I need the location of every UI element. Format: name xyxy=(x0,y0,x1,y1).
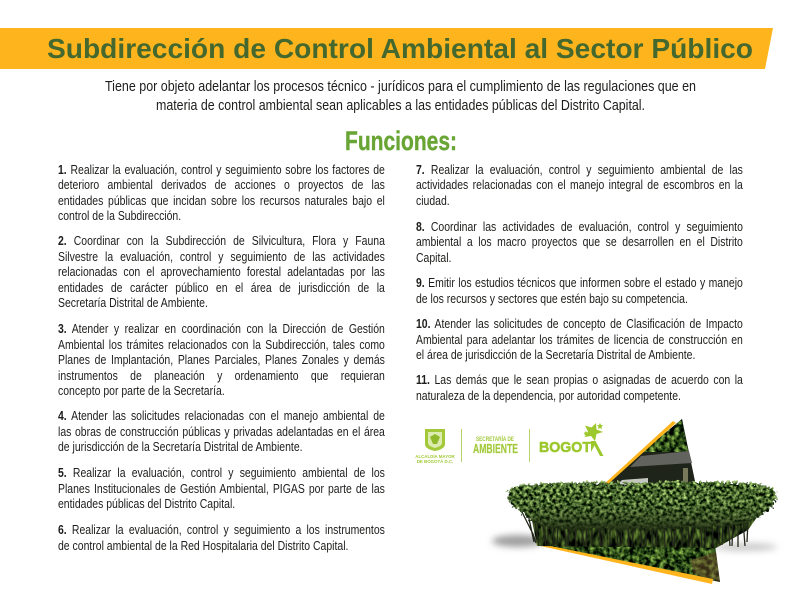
function 2: entidades de carácter público en el área de jurisdicción de la xyxy=(58,280,385,294)
logo: Bogotá: BOGOT xyxy=(539,439,591,456)
function 7: 7. Realizar la evaluación, control y seguimiento ambiental de las xyxy=(416,162,743,176)
function 9 xyxy=(416,276,743,306)
function 5: Planes Institucionales de Gestión Ambiental, PIGAS por parte de las xyxy=(58,482,385,496)
function 3: Ambiental los trámites relacionados con la Subdirección, tales como xyxy=(58,338,385,352)
function 11 xyxy=(416,373,743,402)
function 7 xyxy=(416,162,743,208)
function 8: ambiental a los macro proyectos que se desarrollen en el Distrito xyxy=(416,235,743,249)
function 4: las obras de construcción públicas y privadas adelantadas en el área xyxy=(58,424,385,438)
function 6 xyxy=(58,523,385,552)
intro text: Tiene por objeto adelantar los procesos técnico - jurídicos para el cumplimiento de las regulaciones que en xyxy=(105,78,696,95)
function 10: Ambiental para adelantar los trámites de licencia de construcción en xyxy=(416,332,743,346)
logo: Secretaría de Ambiente: AMBIENTE xyxy=(473,441,518,456)
function 2: 2. Coordinar con la Subdirección de Silvicultura, Flora y Fauna xyxy=(58,234,385,248)
function 5: entidades públicas del Distrito Capital. xyxy=(58,497,235,511)
function 4 xyxy=(58,409,385,454)
logo: Alcaldía Mayor: DE BOGOTÁ D.C. xyxy=(417,459,453,464)
logo: Alcaldía Mayor: ALCALDÍA MAYOR xyxy=(415,454,456,459)
function 11: naturaleza de la dependencia, por autoridad competente. xyxy=(416,388,681,402)
logo: Bogotá xyxy=(539,423,604,456)
function 3: concepto por parte de la Secretaría. xyxy=(58,384,225,398)
photo composition xyxy=(490,419,778,584)
function 3 xyxy=(58,322,385,398)
function 10: 10. Atender las solicitudes de concepto de Clasificación de Impacto xyxy=(416,317,743,331)
function 1 xyxy=(58,162,385,223)
title banner: Subdirección de Control Ambiental al Sector Público xyxy=(47,33,753,64)
function 2: relacionadas con el aprovechamiento forestal adelantadas por las xyxy=(58,265,385,279)
hedge foliage xyxy=(507,482,777,530)
function 3: instrumentos de planeación y ordenamiento que requieran xyxy=(58,368,385,382)
function 1: 1. Realizar la evaluación, control y seguimiento sobre los factores de xyxy=(58,162,385,176)
function 2: Secretaría Distrital de Ambiente. xyxy=(58,296,208,310)
function 6: 6. Realizar la evaluación, control y seguimiento a los instrumentos xyxy=(58,523,385,537)
ground triangle xyxy=(536,545,720,584)
function 9: 9. Emitir los estudios técnicos que informen sobre el estado y manejo xyxy=(416,276,743,290)
title banner xyxy=(0,28,773,69)
function 11: 11. Las demás que le sean propias o asignadas de acuerdo con la xyxy=(416,373,743,387)
function 7: actividades relacionadas con el manejo integral de escombros en la xyxy=(416,178,743,192)
function 3: 3. Atender y realizar en coordinación con la Dirección de Gestión xyxy=(58,322,385,336)
ground shadows xyxy=(492,535,777,551)
function 4: 4. Atender las solicitudes relacionadas con el manejo ambiental de xyxy=(58,409,385,423)
logos xyxy=(415,423,604,464)
function 10 xyxy=(416,317,743,362)
function 9: de los recursos y sectores que estén bajo su competencia. xyxy=(416,292,688,306)
intro text xyxy=(105,78,696,114)
function 2: Silvestre la evaluación, control y seguimiento de las actividades xyxy=(58,250,385,264)
intro text: materia de control ambiental sean aplicables a las entidades públicas del Distrito Capital. xyxy=(156,97,645,114)
function 2 xyxy=(58,234,385,310)
function 1: control de la Subdirección. xyxy=(58,209,181,223)
function 5: 5. Realizar la evaluación, control y seguimiento ambiental de los xyxy=(58,466,385,480)
function 10: el área de jurisdicción de la Secretaría Distrital de Ambiente. xyxy=(416,348,695,362)
logo: Secretaría de Ambiente: SECRETARÍA DE xyxy=(476,434,514,443)
trunks xyxy=(522,510,762,548)
function 8: Capital. xyxy=(416,250,451,264)
building triangle xyxy=(603,419,696,486)
heading: Funciones: Funciones: xyxy=(345,126,457,156)
function 7: ciudad. xyxy=(416,194,450,208)
function 1: deterioro ambiental derivados de acciones o proyectos de las xyxy=(58,178,385,192)
function 1: entidades públicas que incidan sobre los recursos naturales bajo el xyxy=(58,194,385,208)
function 8 xyxy=(416,220,743,264)
logo: Alcaldía Mayor xyxy=(415,429,456,464)
function 3: Planes de Implantación, Planes Parciales, Planes Zonales y demás xyxy=(58,353,385,367)
function 4: de jurisdicción de la Secretaría Distrital de Ambiente. xyxy=(58,440,303,454)
function 6: de control ambiental de la Red Hospitalaria del Distrito Capital. xyxy=(58,538,348,552)
function 8: 8. Coordinar las actividades de evaluación, control y seguimiento xyxy=(416,220,743,234)
logo: Secretaría de Ambiente xyxy=(473,434,518,456)
function 5 xyxy=(58,466,385,511)
